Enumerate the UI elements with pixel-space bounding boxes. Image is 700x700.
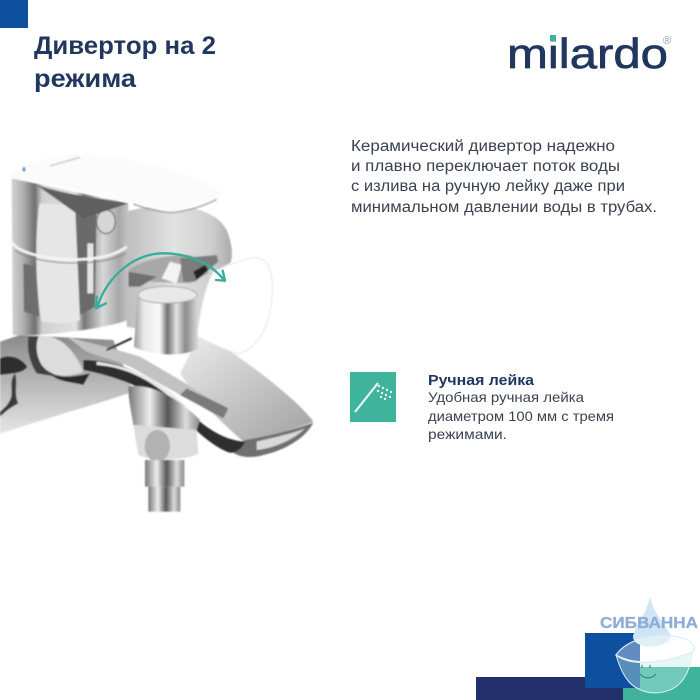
feature block: hand shower [350,372,614,442]
faucet drawing [0,154,313,512]
hose connector [145,460,184,487]
watermark drop [633,597,671,646]
wall plate [127,206,232,340]
description text: с излива на ручную лейку даже при [351,178,625,195]
lever blue dot [23,167,25,172]
description text: Керамический дивертор надежно [351,138,615,155]
description text: и плавно переключает поток воды [351,158,620,175]
watermark face [640,665,656,678]
plate recess shadow [128,272,157,287]
base tube [0,335,133,434]
spout [180,337,313,442]
description text [351,138,657,216]
dark recess of plate [128,255,208,283]
body ring [12,242,127,260]
body left stripe [23,263,39,317]
feature text [428,389,614,442]
logo accent square [550,35,556,41]
title: Дивертор на 2 [34,32,216,60]
watermark bath body [616,652,692,693]
spout neck curve [83,360,245,453]
diverter tab behind knob [162,262,182,283]
body bolt [97,210,115,234]
neck slot [180,388,228,418]
faucet body [12,178,128,335]
diverter knob [134,297,198,354]
neck top band [67,337,223,415]
body panel reflection [36,203,80,323]
lever underside shadow [37,185,128,218]
feature heading: Ручная лейка [428,372,535,389]
description text: минимальном давлении воды в трубах. [351,199,657,216]
corner square: top left [0,0,28,28]
title [34,32,216,93]
neck highlight [97,362,187,407]
lever brand mark [50,157,80,166]
body center dark [75,203,97,315]
feature text: Удобная ручная лейка [428,389,584,405]
watermark label: СИБВАННА [600,615,698,632]
plate white lobe [197,258,272,354]
feature text: диаметром 100 мм с тремя [428,408,614,424]
registered mark: ® [663,35,671,47]
neck dark line [107,338,132,350]
hex nut [133,425,198,459]
title: режима [34,65,137,93]
base dark reflections [0,356,27,375]
spout mouth [230,423,313,457]
spout lower body [128,386,200,430]
icon: hand shower [350,372,396,422]
illustration: chrome bath faucet [0,154,313,512]
lever handle [10,154,220,213]
logo: milardo: milardo [507,30,668,77]
curved arrow [96,253,225,308]
lever edge [133,199,217,213]
knob cap [138,286,197,303]
watermark: Sibvanna [600,597,698,693]
body center highlight [87,243,93,293]
corner blocks: bottom right [476,633,700,700]
feature text: режимами. [428,426,507,442]
watermark bath rim [616,636,694,662]
